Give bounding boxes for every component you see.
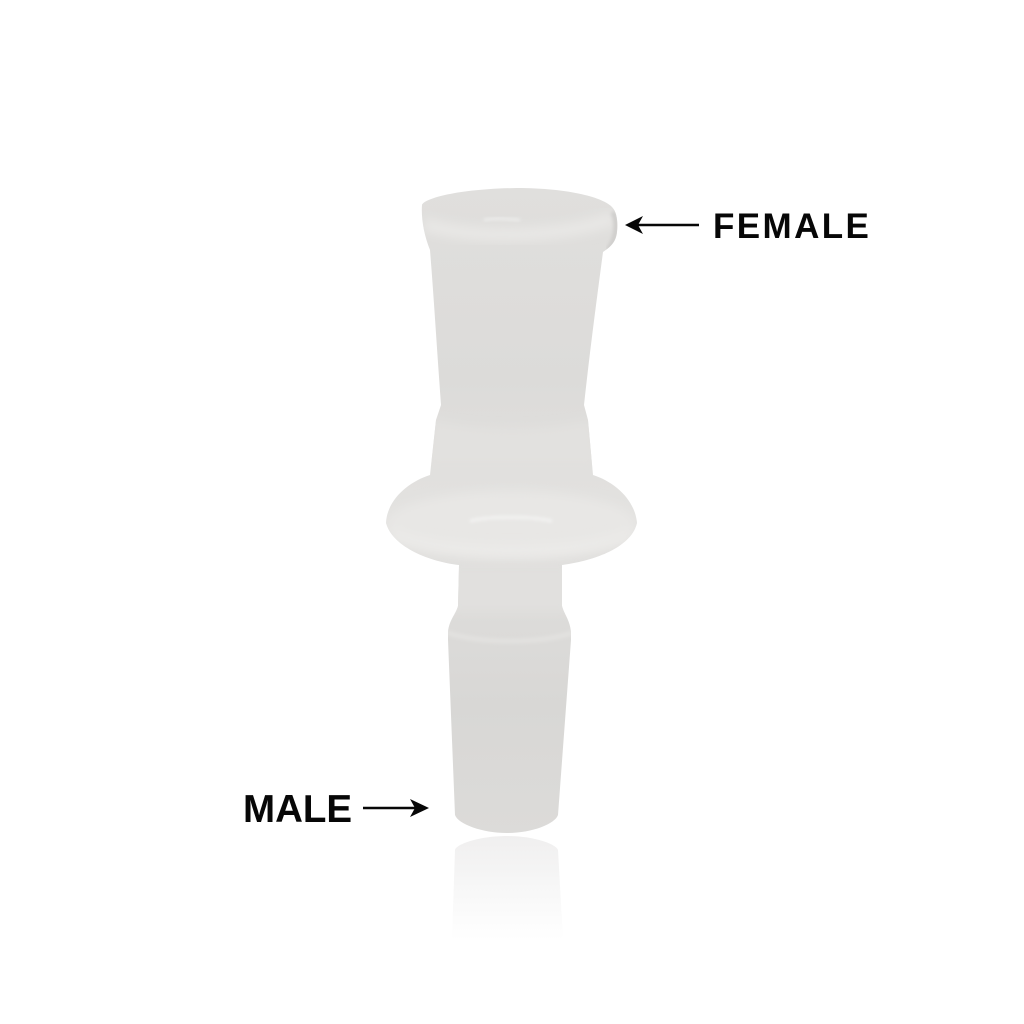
male joint shoulder (445, 632, 575, 641)
flange disc (413, 514, 612, 556)
reflection of the male joint (452, 836, 563, 940)
arrow: female pointer (625, 216, 699, 234)
stem (450, 568, 570, 612)
label: female: FEMALE (713, 207, 871, 246)
adapter base silhouette (380, 185, 645, 835)
arrow: male pointer (363, 799, 429, 817)
waist highlight (428, 420, 596, 465)
glass adapter (380, 185, 645, 835)
female rim (477, 212, 618, 249)
label: male: MALE (243, 788, 352, 831)
